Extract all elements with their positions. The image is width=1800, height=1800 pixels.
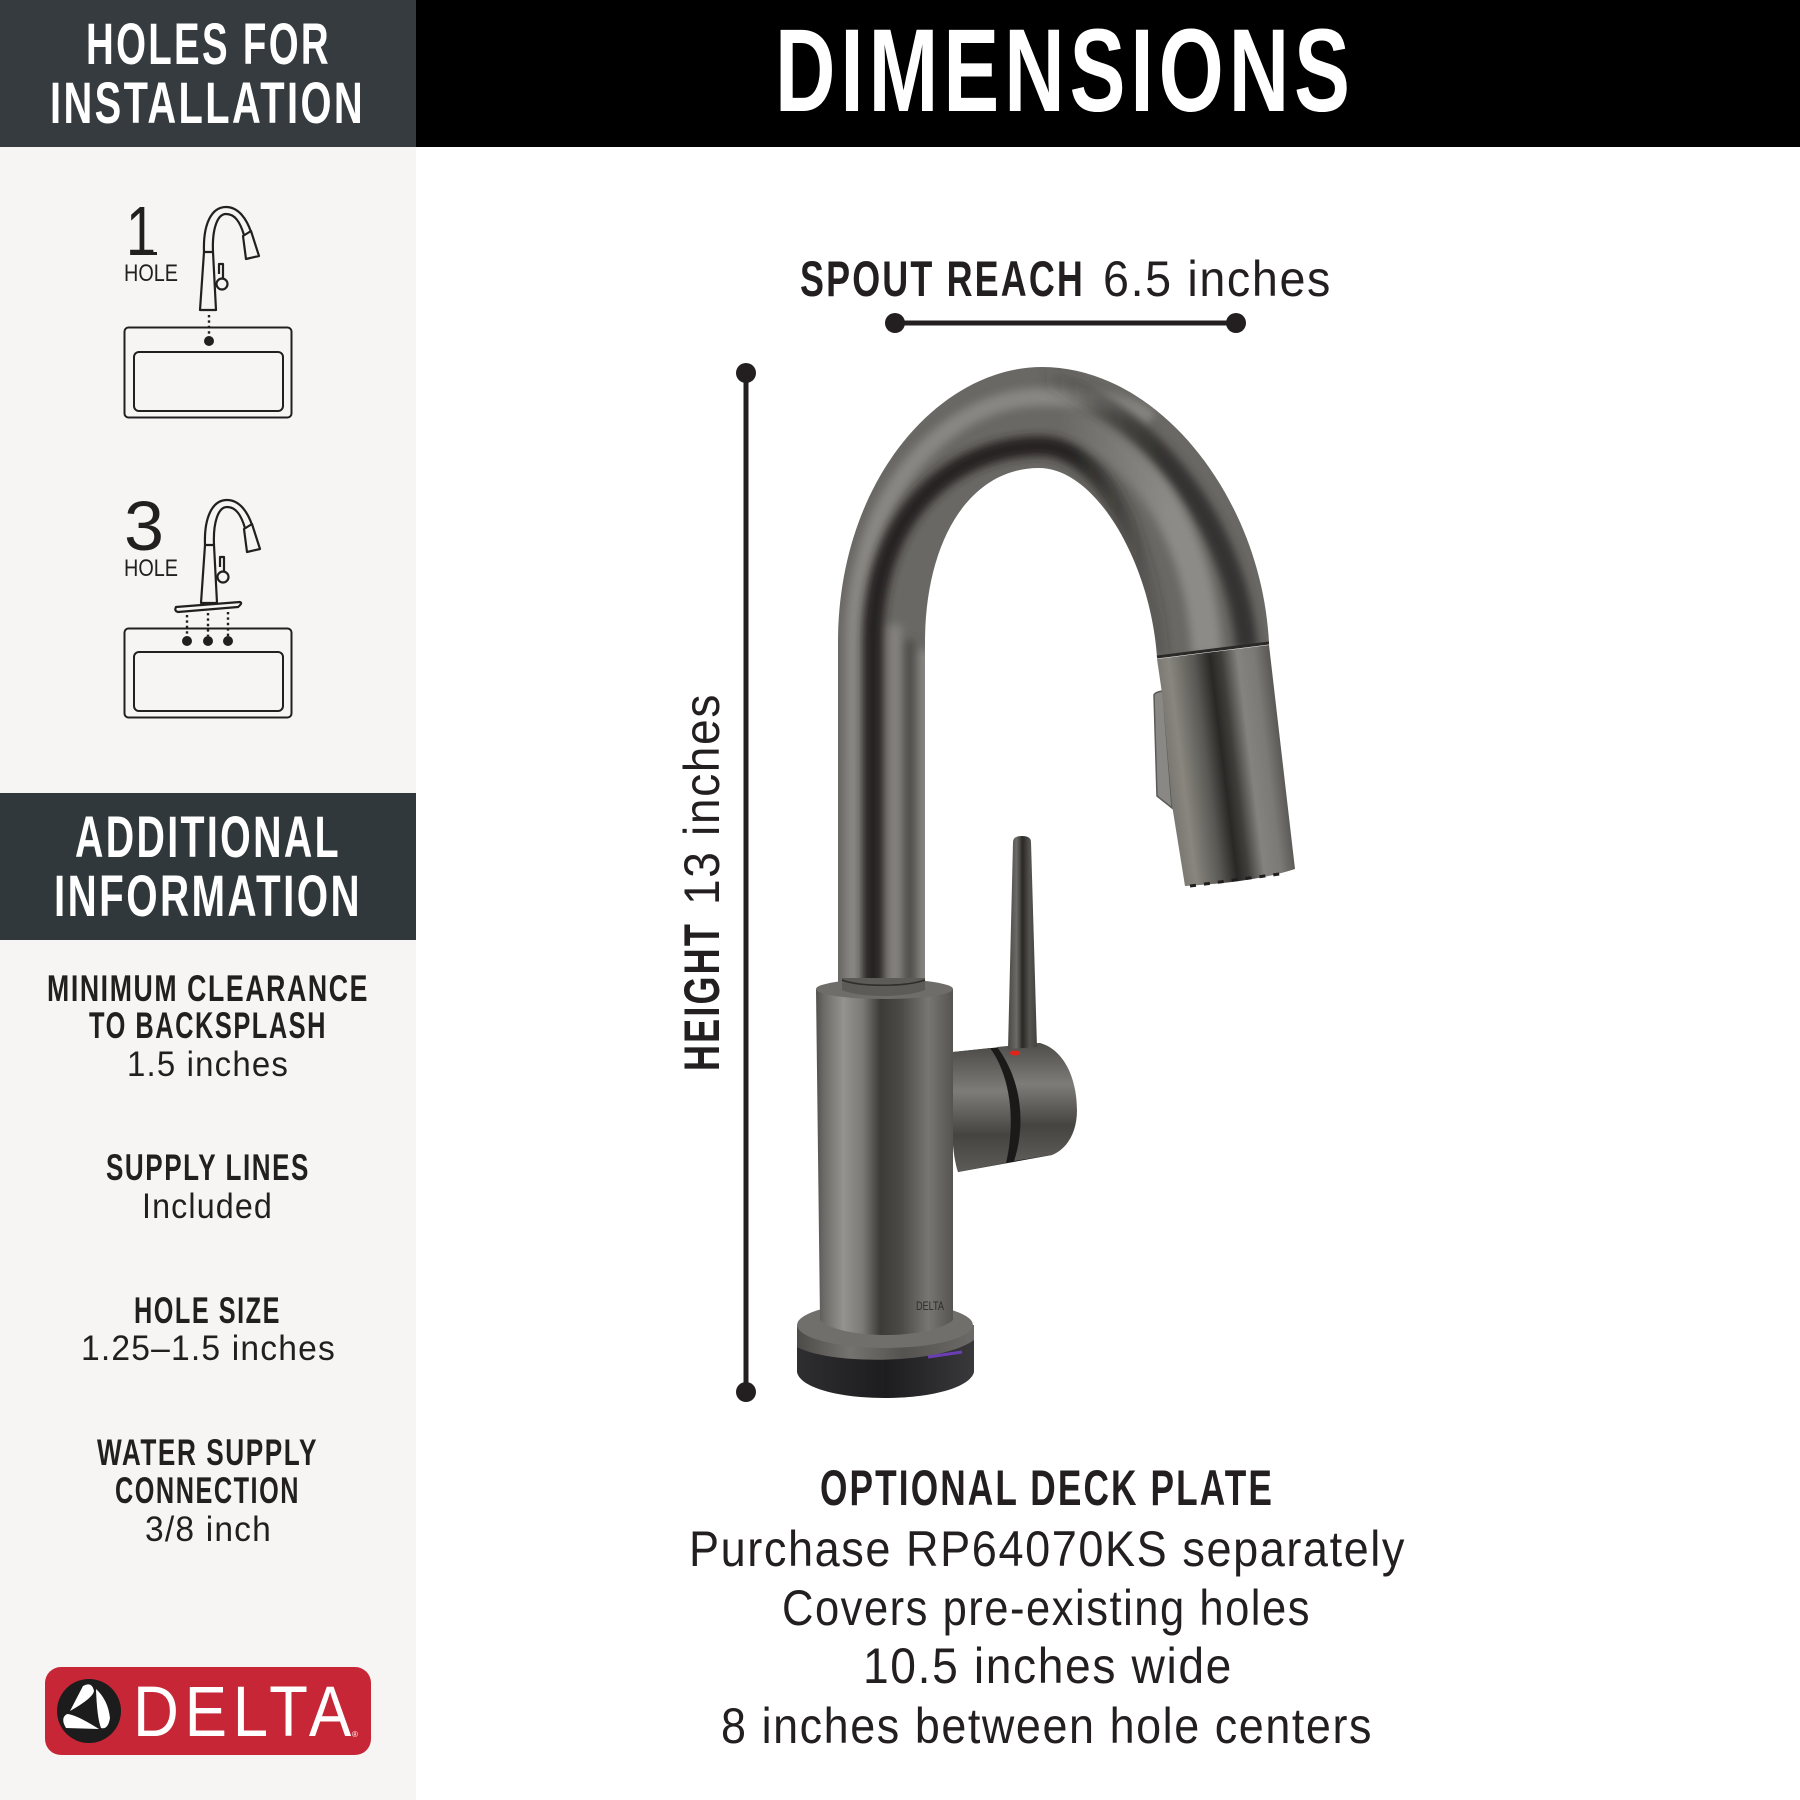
logo: delta [45, 1667, 371, 1755]
text block: minimum clearance: 1.5 inches [127, 1045, 289, 1084]
dimension: height [674, 363, 756, 1402]
text block: supply lines [106, 1147, 310, 1226]
title bar: dimensions: DIMENSIONS [775, 5, 1355, 137]
panel: left sidebar background [0, 146, 416, 1800]
text block: optional deck plate: OPTIONAL DECK PLATE [820, 1460, 1274, 1516]
text block: minimum clearance: TO BACKSPLASH [89, 1005, 327, 1046]
icon: 1 hole installation: HOLE [124, 260, 178, 287]
icon: 1 hole installation [124, 192, 292, 418]
faucet product image [797, 367, 1295, 1398]
dimension: spout reach: SPOUT REACH [800, 251, 1085, 307]
text block: optional deck plate: 8 inches between hole centers [721, 1698, 1373, 1754]
text block: optional deck plate: Purchase RP64070KS separately [689, 1521, 1406, 1577]
faucet: handle [951, 836, 1077, 1172]
text block: optional deck plate: 10.5 inches wide [863, 1638, 1233, 1694]
icon: 3 hole installation: HOLE [124, 555, 178, 582]
dimension: height: HEIGHT [674, 922, 730, 1071]
icon: 3 hole installation [124, 487, 292, 718]
icon: 1 hole installation: 1 [126, 192, 156, 270]
text block: water supply connection: WATER SUPPLY [97, 1432, 318, 1473]
text block: hole size [81, 1290, 336, 1368]
heading: holes for installation [0, 0, 416, 147]
text block: optional deck plate [689, 1460, 1406, 1754]
text block: hole size: HOLE SIZE [134, 1290, 281, 1331]
icon: 3 hole installation: 3 [124, 487, 164, 565]
heading: additional information: ADDITIONAL [75, 805, 341, 870]
faucet: arched spout [838, 367, 1269, 1000]
text block: supply lines: SUPPLY LINES [106, 1147, 310, 1188]
faucet: pull-down spray head [1157, 645, 1295, 886]
heading: holes for installation: INSTALLATION [50, 71, 365, 136]
heading: additional information [0, 793, 416, 940]
logo: delta: ® [352, 1730, 358, 1739]
faucet: spray button [1154, 691, 1172, 808]
text block: hole size: 1.25–1.5 inches [81, 1329, 336, 1368]
heading: additional information: INFORMATION [54, 864, 362, 929]
text block: supply lines: Included [142, 1187, 273, 1226]
text block: minimum clearance [47, 968, 369, 1084]
text block: optional deck plate: Covers pre-existing holes [782, 1580, 1311, 1636]
logo: delta: DELTA [133, 1673, 357, 1752]
title bar: dimensions [416, 0, 1800, 147]
text block: water supply connection: 3/8 inch [145, 1510, 272, 1549]
text block: water supply connection: CONNECTION [115, 1470, 300, 1511]
faucet: cylindrical body: DELTA [916, 1299, 944, 1313]
faucet: cylindrical body [816, 978, 953, 1335]
text block: water supply connection [97, 1432, 318, 1549]
dimension: spout reach [800, 251, 1332, 333]
text block: minimum clearance: MINIMUM CLEARANCE [47, 968, 369, 1009]
heading: holes for installation: HOLES FOR [86, 12, 331, 77]
faucet: base and sensor ring [797, 1302, 974, 1398]
dimension: height: 13 inches [674, 693, 730, 905]
dimension: spout reach: 6.5 inches [1103, 251, 1332, 307]
